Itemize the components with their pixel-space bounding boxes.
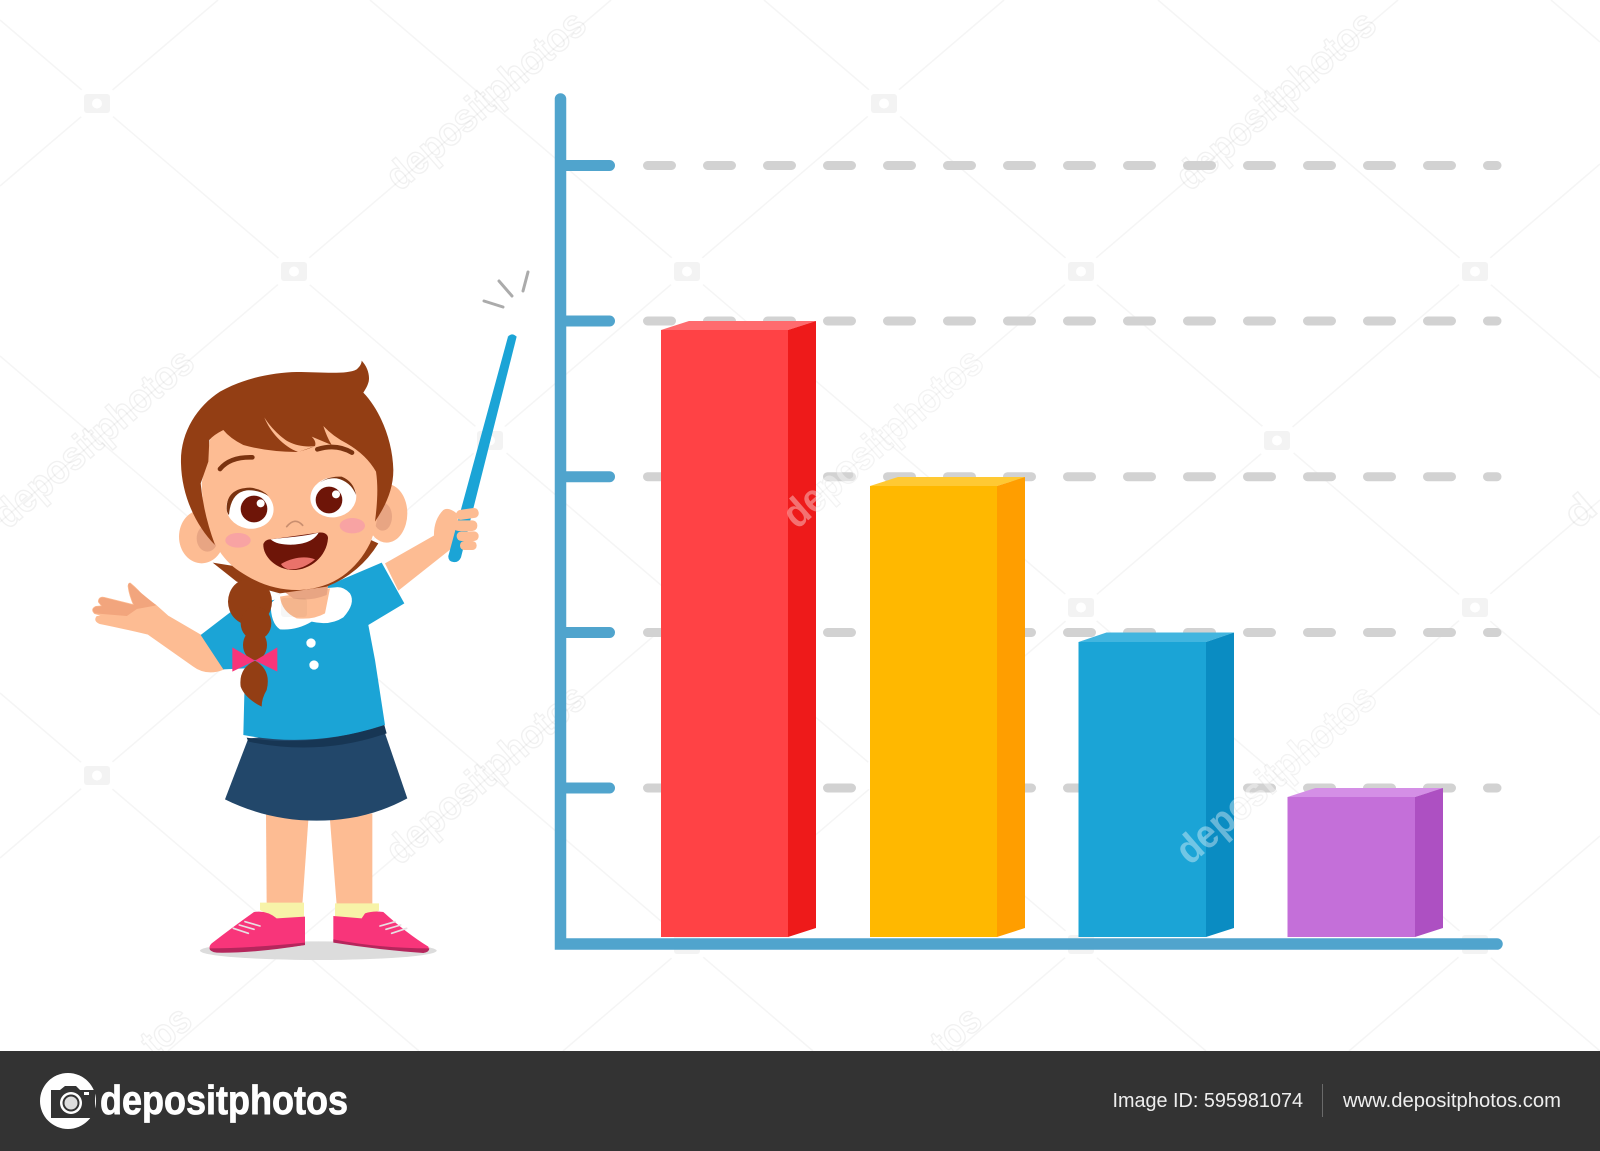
red bar [661, 321, 816, 937]
shirt [201, 563, 404, 740]
mouth [263, 532, 328, 570]
right eye [308, 474, 359, 520]
icon: sparkle lines at pointer tip [484, 272, 528, 307]
chart axes [560, 99, 1497, 944]
shirt buttons [306, 638, 319, 670]
right arm [385, 534, 452, 591]
palm gripping pointer [434, 509, 463, 550]
text: depositphotos [774, 340, 992, 537]
text: tos [922, 997, 990, 1065]
face [202, 407, 379, 590]
socks [260, 903, 379, 918]
blue bar [1078, 632, 1234, 937]
legs [266, 813, 372, 905]
icon: depositphotos camera logo [40, 1073, 96, 1129]
bar chart [560, 99, 1497, 944]
skirt [225, 728, 407, 821]
right shoe [333, 912, 429, 953]
yellow bar [870, 477, 1025, 937]
pointer stick [448, 334, 517, 562]
text: tos [132, 997, 200, 1065]
collar and neck [271, 584, 352, 630]
text: depositphotos [774, 340, 992, 537]
hair bow [232, 647, 277, 672]
text: depositphotos [1167, 676, 1385, 873]
text: depositphotos [1167, 676, 1385, 873]
image id: Image ID: 595981074 [1112, 1090, 1303, 1112]
nose [287, 521, 303, 527]
purple bar [1288, 788, 1443, 937]
left shoe [209, 912, 305, 953]
fringe highlight [264, 417, 315, 452]
footer bar [0, 1051, 1600, 1151]
left eye [223, 484, 277, 532]
text: depositphotos [377, 676, 595, 873]
skirt waistband shadow [247, 725, 387, 748]
cheeks [225, 518, 365, 548]
gripping fingers [453, 507, 479, 550]
braid [228, 578, 272, 707]
logo wordmark: depositphotos [100, 1077, 348, 1123]
back hair strands [213, 537, 378, 593]
hair top [181, 361, 393, 545]
ears [179, 484, 407, 563]
eyebrows [220, 447, 352, 469]
floor shadow [200, 941, 437, 960]
left arm and open hand [94, 584, 223, 671]
girl character presenting [94, 334, 517, 960]
website url: www.depositphotos.com [1342, 1090, 1561, 1112]
